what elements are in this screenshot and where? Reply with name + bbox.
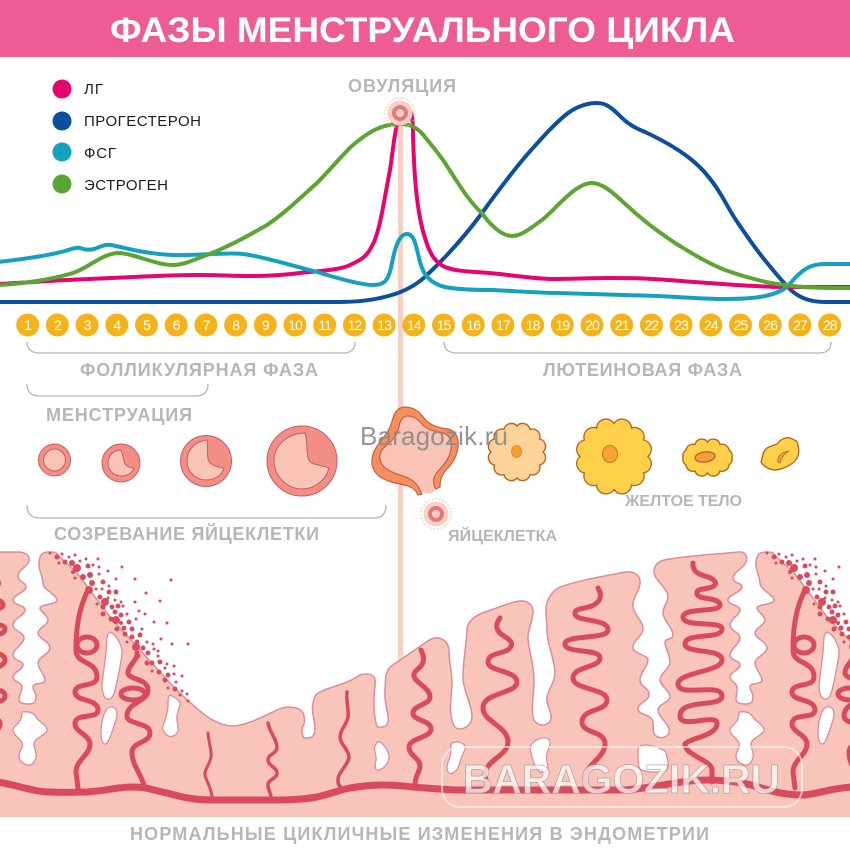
day number row 1-28: 10	[288, 317, 303, 333]
day number row 1-28: 1	[24, 317, 32, 333]
icon: released egg	[421, 499, 451, 529]
legend	[52, 80, 201, 194]
corpus luteum stage 4	[761, 438, 799, 470]
day number row 1-28: 20	[585, 317, 600, 333]
hormone line chart	[0, 103, 850, 302]
day number row 1-28: 13	[377, 317, 392, 333]
day number row 1-28: 5	[143, 317, 151, 333]
day number row 1-28: 25	[734, 317, 748, 333]
legend: ФСГ	[84, 145, 116, 162]
ruptured follicle	[372, 407, 458, 495]
egg maturation bracket and label	[27, 505, 386, 544]
ovulation label: ОВУЛЯЦИЯ	[348, 76, 456, 96]
spiral arteries	[0, 563, 850, 797]
day number row 1-28: 3	[84, 317, 92, 333]
day number row 1-28: 18	[526, 317, 541, 333]
corpus luteum stage 1	[488, 423, 546, 481]
header band with title	[0, 0, 850, 57]
day number row 1-28: 9	[262, 317, 270, 333]
follicular phase bracket and label	[27, 342, 355, 380]
endometrium tissue	[0, 552, 850, 829]
day number row 1-28: 22	[645, 317, 659, 333]
day number row 1-28: 17	[496, 317, 511, 333]
corpus luteum stage 3	[683, 439, 732, 476]
corpus luteum stage 2	[577, 419, 651, 494]
shedding blood dots right	[766, 552, 850, 702]
day number row 1-28: 19	[556, 317, 570, 333]
watermark box bottom	[442, 747, 802, 807]
follicular phase bracket and label: ФОЛЛИКУЛЯРНАЯ ФАЗА	[80, 360, 318, 380]
day number row 1-28: 7	[203, 317, 211, 333]
day number row 1-28	[16, 314, 841, 336]
shedding blood dots left	[48, 552, 190, 702]
day number row 1-28: 28	[823, 317, 838, 333]
day number row 1-28: 21	[615, 317, 630, 333]
egg cell label: ЯЙЦЕКЛЕТКА	[448, 526, 557, 545]
day number row 1-28: 16	[466, 317, 481, 333]
day number row 1-28: 14	[407, 317, 422, 333]
endometrium caption: НОРМАЛЬНЫЕ ЦИКЛИЧНЫЕ ИЗМЕНЕНИЯ В ЭНДОМЕТРИИ	[130, 824, 709, 844]
maturing follicles	[38, 426, 337, 496]
menstruation bracket and label	[27, 384, 208, 425]
day number row 1-28: 2	[54, 317, 62, 333]
ovulation vertical line	[398, 120, 403, 660]
legend: ПРОГЕСТЕРОН	[84, 113, 201, 130]
menstruation bracket and label: МЕНСТРУАЦИЯ	[46, 405, 192, 425]
icon: ovulation egg	[385, 98, 415, 128]
legend: ЭСТРОГЕН	[84, 177, 168, 194]
watermark text top: Baragozik.ru	[360, 421, 508, 451]
day number row 1-28: 23	[674, 317, 689, 333]
white gland islands	[13, 632, 839, 774]
header band with title: ФАЗЫ МЕНСТРУАЛЬНОГО ЦИКЛА	[110, 11, 735, 50]
main basal blood vessel	[0, 780, 850, 800]
day number row 1-28: 26	[763, 317, 778, 333]
day number row 1-28: 11	[318, 317, 332, 333]
egg maturation bracket and label: СОЗРЕВАНИЕ ЯЙЦЕКЛЕТКИ	[54, 523, 319, 544]
day number row 1-28: 6	[173, 317, 181, 333]
day number row 1-28: 15	[437, 317, 451, 333]
day number row 1-28: 8	[232, 317, 240, 333]
luteal phase bracket and label	[444, 342, 831, 380]
day number row 1-28: 4	[113, 317, 121, 333]
day number row 1-28: 27	[793, 317, 808, 333]
day number row 1-28: 24	[704, 317, 719, 333]
corpus luteum label: ЖЕЛТОЕ ТЕЛО	[624, 493, 742, 510]
day number row 1-28: 12	[348, 317, 362, 333]
watermark box bottom: BARAGOZIK.RU	[463, 756, 780, 802]
luteal phase bracket and label: ЛЮТЕИНОВАЯ ФАЗА	[543, 360, 742, 380]
legend: ЛГ	[84, 81, 103, 98]
